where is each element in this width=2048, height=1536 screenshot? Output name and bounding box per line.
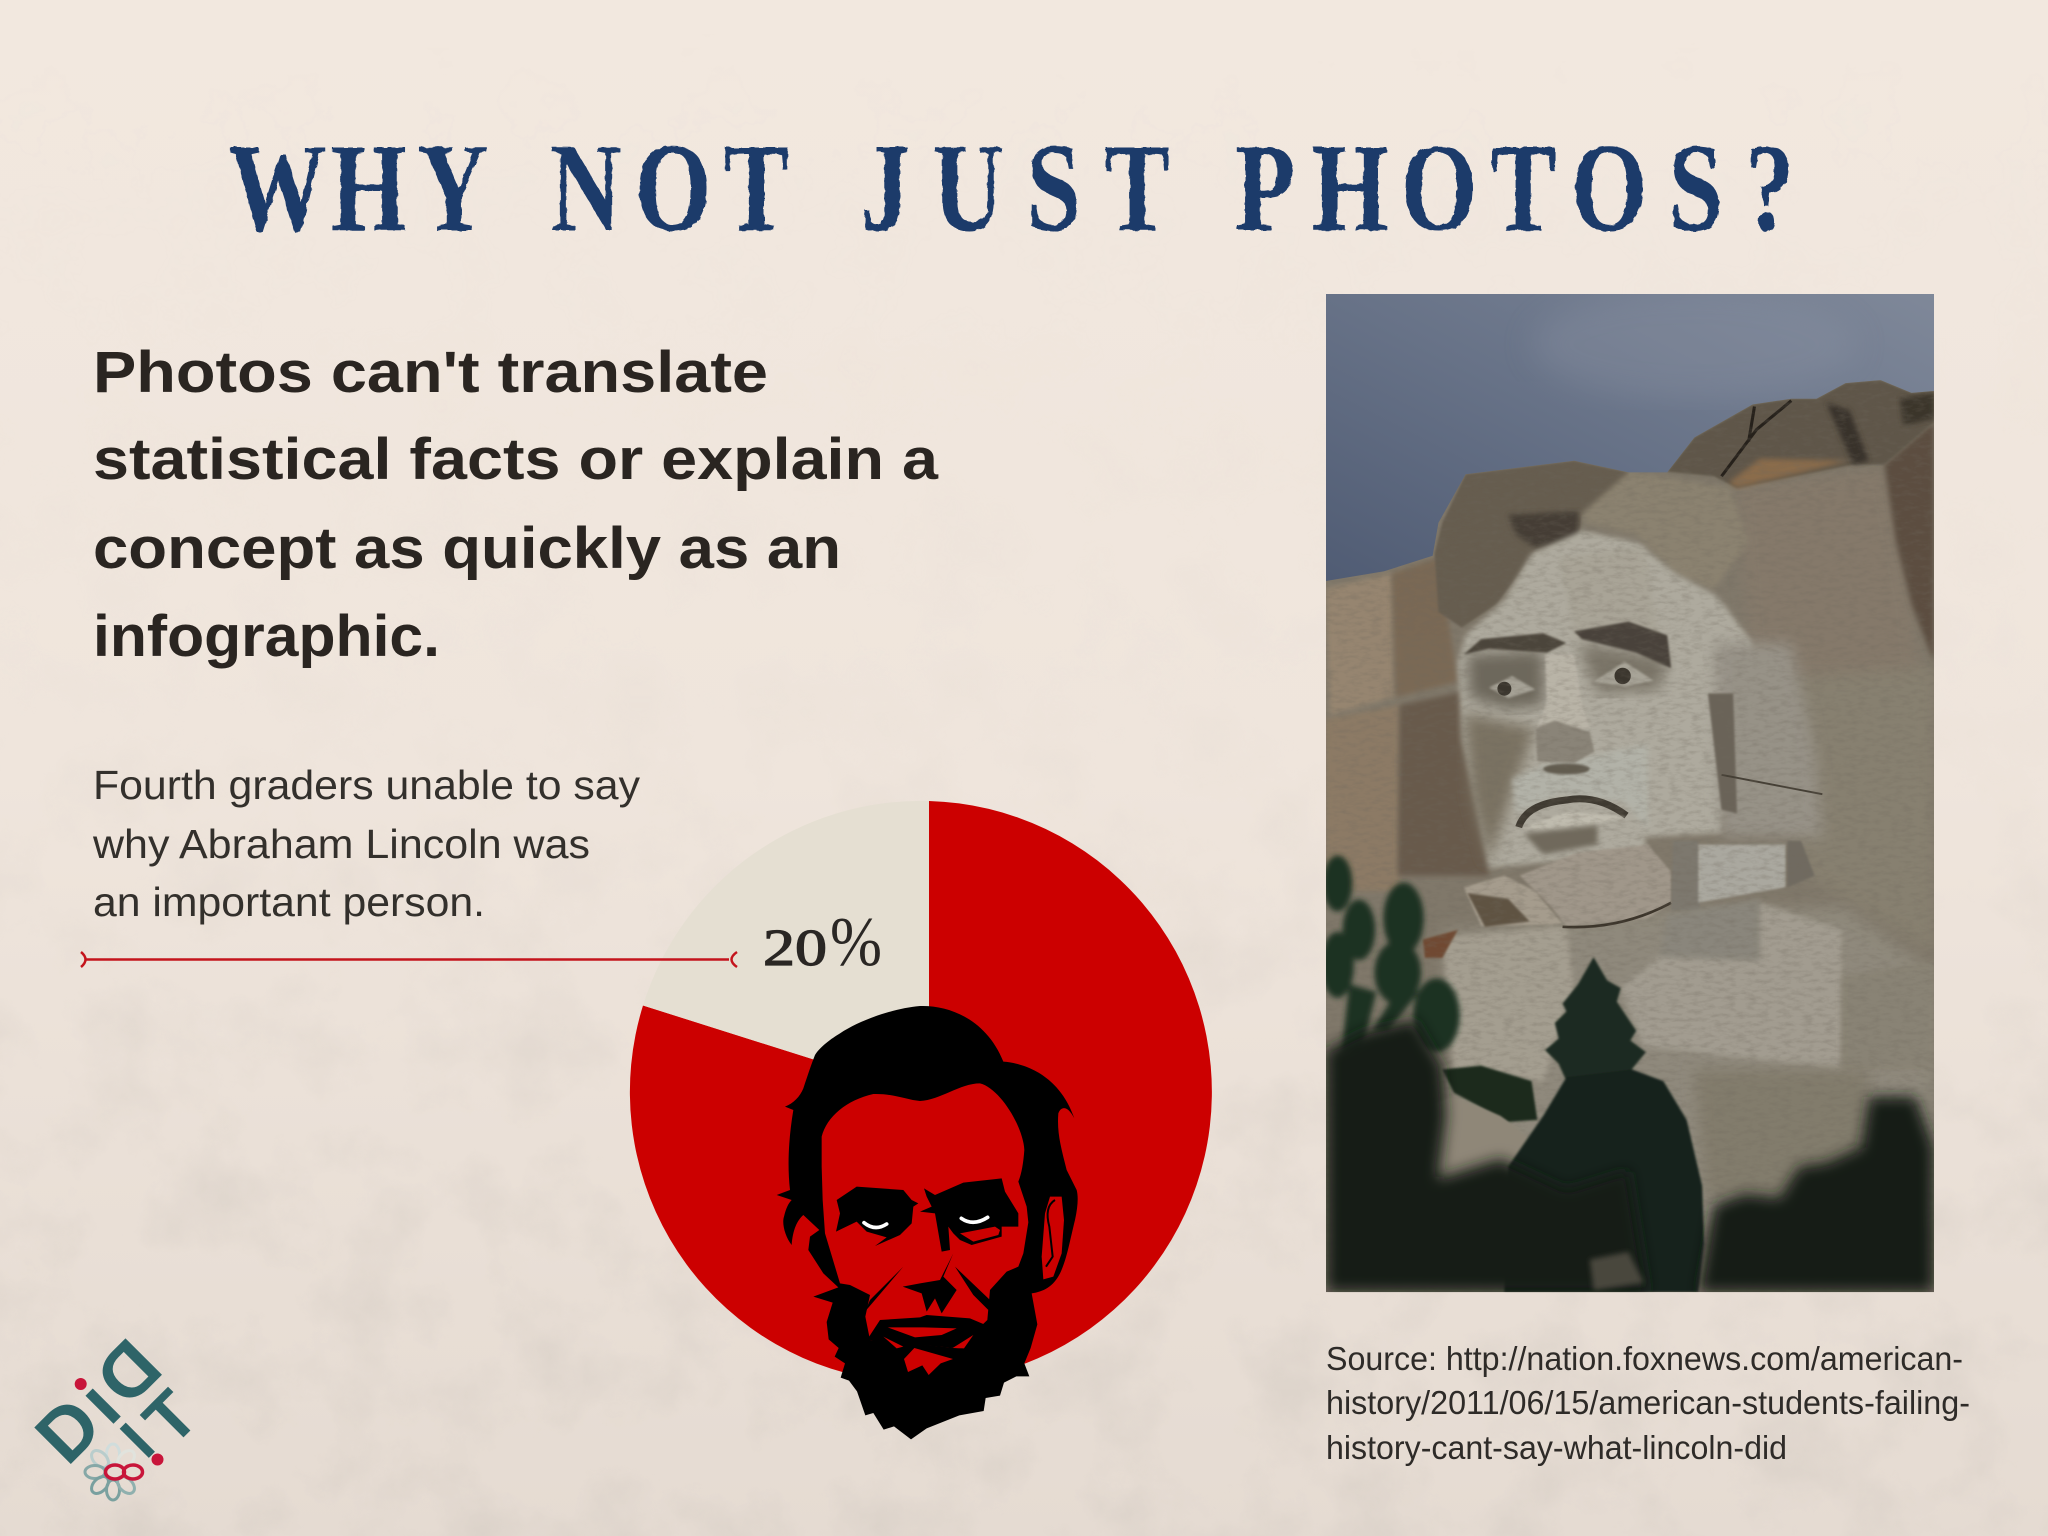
hair and beard silhouette (777, 1006, 1078, 1439)
face (822, 1083, 1028, 1348)
heading text block: statistical facts or explain a (93, 427, 939, 492)
left rock blocks (1326, 573, 1394, 715)
value label: 20% (763, 904, 882, 981)
title: WHY NOT JUST PHOTOS? (229, 118, 1794, 258)
source citation: history-cant-say-what-lincoln-did (1326, 1429, 1787, 1466)
statistic description: why Abraham Lincoln was (92, 821, 590, 867)
source citation (1326, 1340, 1970, 1466)
heading text block: infographic. (93, 604, 440, 669)
icon: Abraham Lincoln head (777, 1006, 1078, 1439)
collar stone (1464, 876, 1563, 926)
rock face base (1326, 379, 1934, 1292)
right ear (1042, 1197, 1064, 1279)
rocky scree (1423, 1097, 1535, 1190)
rock surface grain (1326, 379, 1934, 1292)
logo lettering: T (129, 1376, 212, 1459)
sky (1326, 294, 1934, 604)
beard stone (1520, 845, 1671, 926)
left cheek shade (1464, 713, 1535, 864)
cut stone blocks (1671, 841, 1700, 911)
heading text block: concept as quickly as an (93, 516, 841, 581)
foreground right pine mass (1698, 1097, 1934, 1292)
mouth (1519, 799, 1627, 827)
face stone (1458, 531, 1753, 868)
statistic description: Fourth graders unable to say (93, 762, 641, 808)
nose (1538, 654, 1588, 728)
dark shrub (1442, 1066, 1537, 1122)
hair groove (1708, 693, 1737, 814)
logo lettering: I (108, 1411, 167, 1470)
logo lettering (19, 1323, 212, 1479)
pie chart: 20 percent (630, 801, 1212, 1383)
lower stone (1442, 907, 1934, 1225)
pie slice: 20 percent (643, 801, 929, 1096)
background paper texture (0, 941, 2048, 1536)
left pine branches (1321, 855, 1460, 1054)
foreground left pine mass (1326, 1019, 1648, 1292)
top boulders (1667, 380, 1934, 488)
logo lettering: D (19, 1381, 117, 1479)
cheek lines (865, 1267, 903, 1312)
eyes (1489, 676, 1535, 698)
left brow and eye (836, 1187, 918, 1246)
heading text block: Photos can't translate (93, 340, 768, 405)
value label: 20%: % (830, 904, 882, 981)
source citation: history/2011/06/15/american-students-failing- (1326, 1384, 1970, 1421)
logo lettering: ı (62, 1365, 136, 1439)
nose (903, 1253, 957, 1313)
logo flower (85, 1444, 138, 1500)
logo dots (75, 1378, 87, 1390)
photo: Mount Rushmore Lincoln (1321, 290, 1934, 1292)
statistic description (92, 762, 641, 925)
eye sockets (1468, 651, 1543, 709)
eyebrows (1464, 633, 1566, 655)
value label: 20%: 20 (763, 920, 827, 977)
heading text block (93, 340, 939, 669)
mouth (867, 1315, 986, 1348)
logo: Did It (19, 1323, 212, 1500)
chin patch (904, 1348, 953, 1375)
eyes (864, 1217, 988, 1228)
hair boulder (1435, 461, 1636, 627)
right brow and eye (920, 1178, 1018, 1252)
upper right rock (1737, 468, 1919, 682)
logo lettering: D (79, 1323, 177, 1421)
logo infinity (106, 1465, 142, 1479)
center pine tree (1504, 957, 1704, 1292)
statistic description: an important person. (93, 879, 485, 925)
source citation: Source: http://nation.foxnews.com/american- (1326, 1340, 1963, 1377)
pie slice: remaining share (630, 801, 1212, 1383)
connector line (81, 952, 737, 967)
